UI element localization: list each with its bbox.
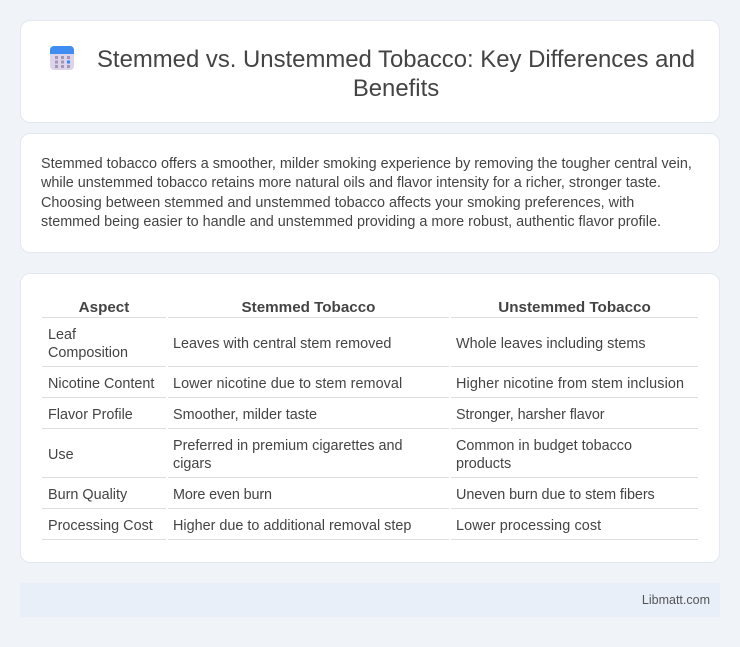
row: burn quality: Uneven burn due to stem fibers <box>456 487 655 503</box>
row: leaf composition: Leaves with central stem removed <box>173 336 391 352</box>
row: use: Use <box>48 447 74 463</box>
panel: introduction <box>20 133 720 253</box>
footer <box>20 583 720 617</box>
intro text: stemmed being easier to handle and unstemmed providing a more robust, authentic flavor profile. <box>41 214 661 230</box>
row: burn quality <box>48 487 655 503</box>
row: leaf composition: Whole leaves including stems <box>456 336 646 352</box>
title: Stemmed vs. Unstemmed Tobacco: Key Differences and Benefits <box>97 46 695 102</box>
row: leaf composition <box>48 327 646 361</box>
row: flavor profile: Flavor Profile <box>48 407 133 423</box>
row: flavor profile: Smoother, milder taste <box>173 407 317 423</box>
panel: title card <box>20 20 720 123</box>
row: use: products <box>456 456 511 472</box>
row: leaf composition: Leaf <box>48 327 76 343</box>
row: nicotine content <box>48 376 684 392</box>
icon: calendar <box>50 46 74 70</box>
row: flavor profile <box>48 407 604 423</box>
table header: Unstemmed Tobacco <box>498 299 651 316</box>
row: burn quality: More even burn <box>173 487 272 503</box>
table header: Stemmed Tobacco <box>242 299 375 316</box>
table header: Aspect <box>79 299 129 316</box>
row: flavor profile: Stronger, harsher flavor <box>456 407 604 423</box>
row: use: Preferred in premium cigarettes and <box>173 438 403 454</box>
row: use <box>48 438 632 472</box>
row: nicotine content: Higher nicotine from stem inclusion <box>456 376 684 392</box>
intro text <box>41 156 692 230</box>
row: processing cost: Processing Cost <box>48 518 153 534</box>
row: burn quality: Burn Quality <box>48 487 127 503</box>
row: leaf composition: Composition <box>48 345 128 361</box>
footer credit: Libmatt.com <box>642 593 710 607</box>
intro text: Choosing between stemmed and unstemmed tobacco affects your smoking preferences, with <box>41 195 634 211</box>
row: processing cost: Lower processing cost <box>456 518 601 534</box>
row: nicotine content: Nicotine Content <box>48 376 154 392</box>
row: nicotine content: Lower nicotine due to stem removal <box>173 376 402 392</box>
intro text: while unstemmed tobacco retains more natural oils and flavor intensity for a richer, stronger taste. <box>41 175 661 191</box>
row: use: Common in budget tobacco <box>456 438 632 454</box>
intro text: Stemmed tobacco offers a smoother, milder smoking experience by removing the tougher central vein, <box>41 156 692 172</box>
row: processing cost: Higher due to additional removal step <box>173 518 411 534</box>
table header <box>79 299 651 316</box>
panel: comparison table <box>20 273 720 563</box>
row: processing cost <box>48 518 602 534</box>
row: use: cigars <box>173 456 211 472</box>
